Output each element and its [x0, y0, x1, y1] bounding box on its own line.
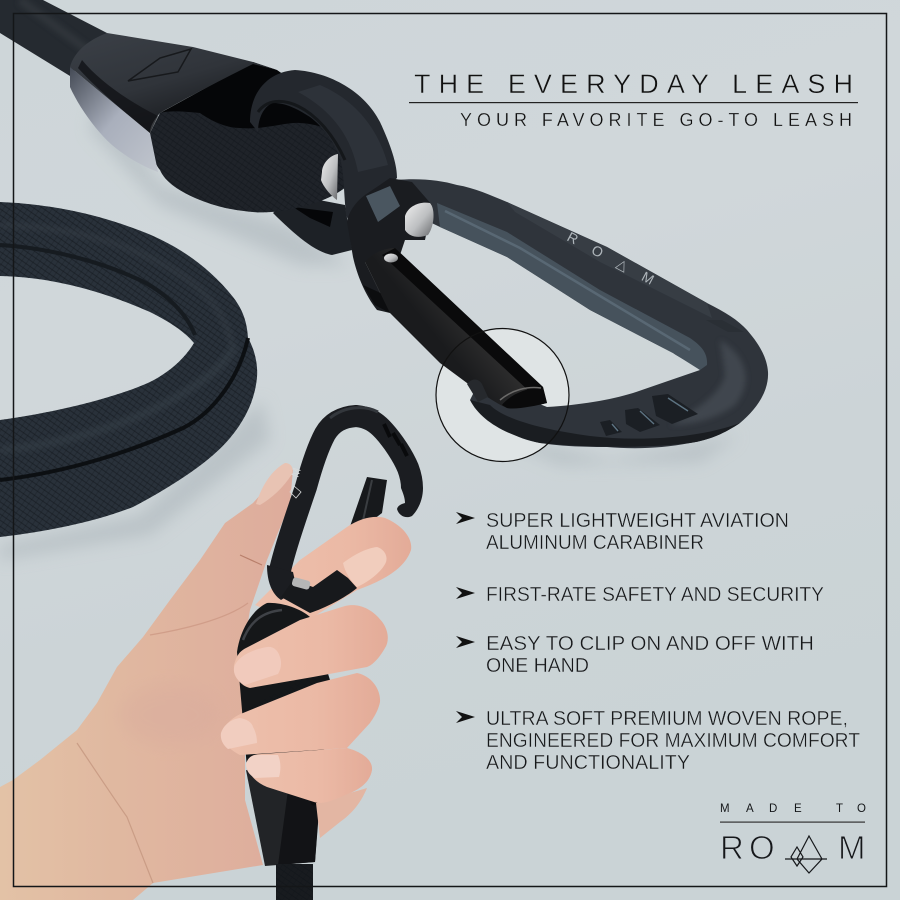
leash ferrule [70, 33, 277, 172]
feature: easy clip: EASY TO CLIP ON AND OFF WITH [486, 632, 814, 655]
small carabiner body [267, 408, 423, 613]
brand logo: MADE TO [720, 803, 866, 815]
title: THE EVERYDAY LEASH [414, 69, 853, 99]
brand logo [720, 803, 866, 873]
middle finger [234, 605, 388, 688]
hinge block [347, 178, 432, 313]
feature: safety: FIRST-RATE SAFETY AND SECURITY [486, 583, 824, 606]
small carabiner gate [335, 477, 387, 572]
feature: lightweight carabiner: ALUMINUM CARABINER [486, 531, 704, 554]
thumb nail [256, 463, 293, 505]
gate [365, 248, 547, 408]
brand logo: R [720, 829, 744, 866]
feature: lightweight carabiner: SUPER LIGHTWEIGHT AVIATION [486, 509, 789, 532]
feature: easy clip [456, 632, 814, 677]
callout circle outline [436, 328, 569, 462]
feature: easy clip: ONE HAND [486, 654, 589, 677]
title [409, 69, 858, 130]
large carabiner [347, 178, 768, 448]
feature: woven rope: AND FUNCTIONALITY [486, 751, 690, 774]
callout circle fill [436, 328, 569, 462]
arrow bullet [456, 512, 475, 524]
feature: woven rope: ULTRA SOFT PREMIUM WOVEN ROPE, [486, 707, 848, 730]
soft shadows under objects [0, 95, 740, 560]
feature: woven rope [456, 707, 860, 774]
brand logo: O [749, 829, 775, 866]
rope through swivel and back of ring [150, 62, 352, 255]
engraved brand on carabiner: RO△M [565, 229, 657, 288]
leash rope top left [0, 0, 107, 76]
grips on carabiner [600, 320, 744, 436]
swivel ring and bolt [250, 70, 397, 235]
finger gripping gate [255, 517, 411, 625]
arrow bullet [456, 636, 475, 648]
subtitle: YOUR FAVORITE GO-TO LEASH [460, 110, 852, 130]
brand logo: M [838, 829, 866, 866]
ring finger [221, 673, 380, 755]
logo mark [785, 836, 827, 873]
rope coil [0, 202, 257, 537]
feature: lightweight carabiner [456, 509, 789, 554]
little finger [246, 748, 372, 803]
hand and arm [0, 464, 293, 900]
lower ring strap and ferrule [237, 603, 330, 900]
arrow bullet [456, 711, 475, 723]
engraved mark on small carabiner: M [289, 466, 304, 479]
feature: woven rope: ENGINEERED FOR MAXIMUM COMFORT [486, 729, 860, 752]
arrow bullet [456, 587, 475, 599]
lower knuckle skin [316, 788, 367, 838]
